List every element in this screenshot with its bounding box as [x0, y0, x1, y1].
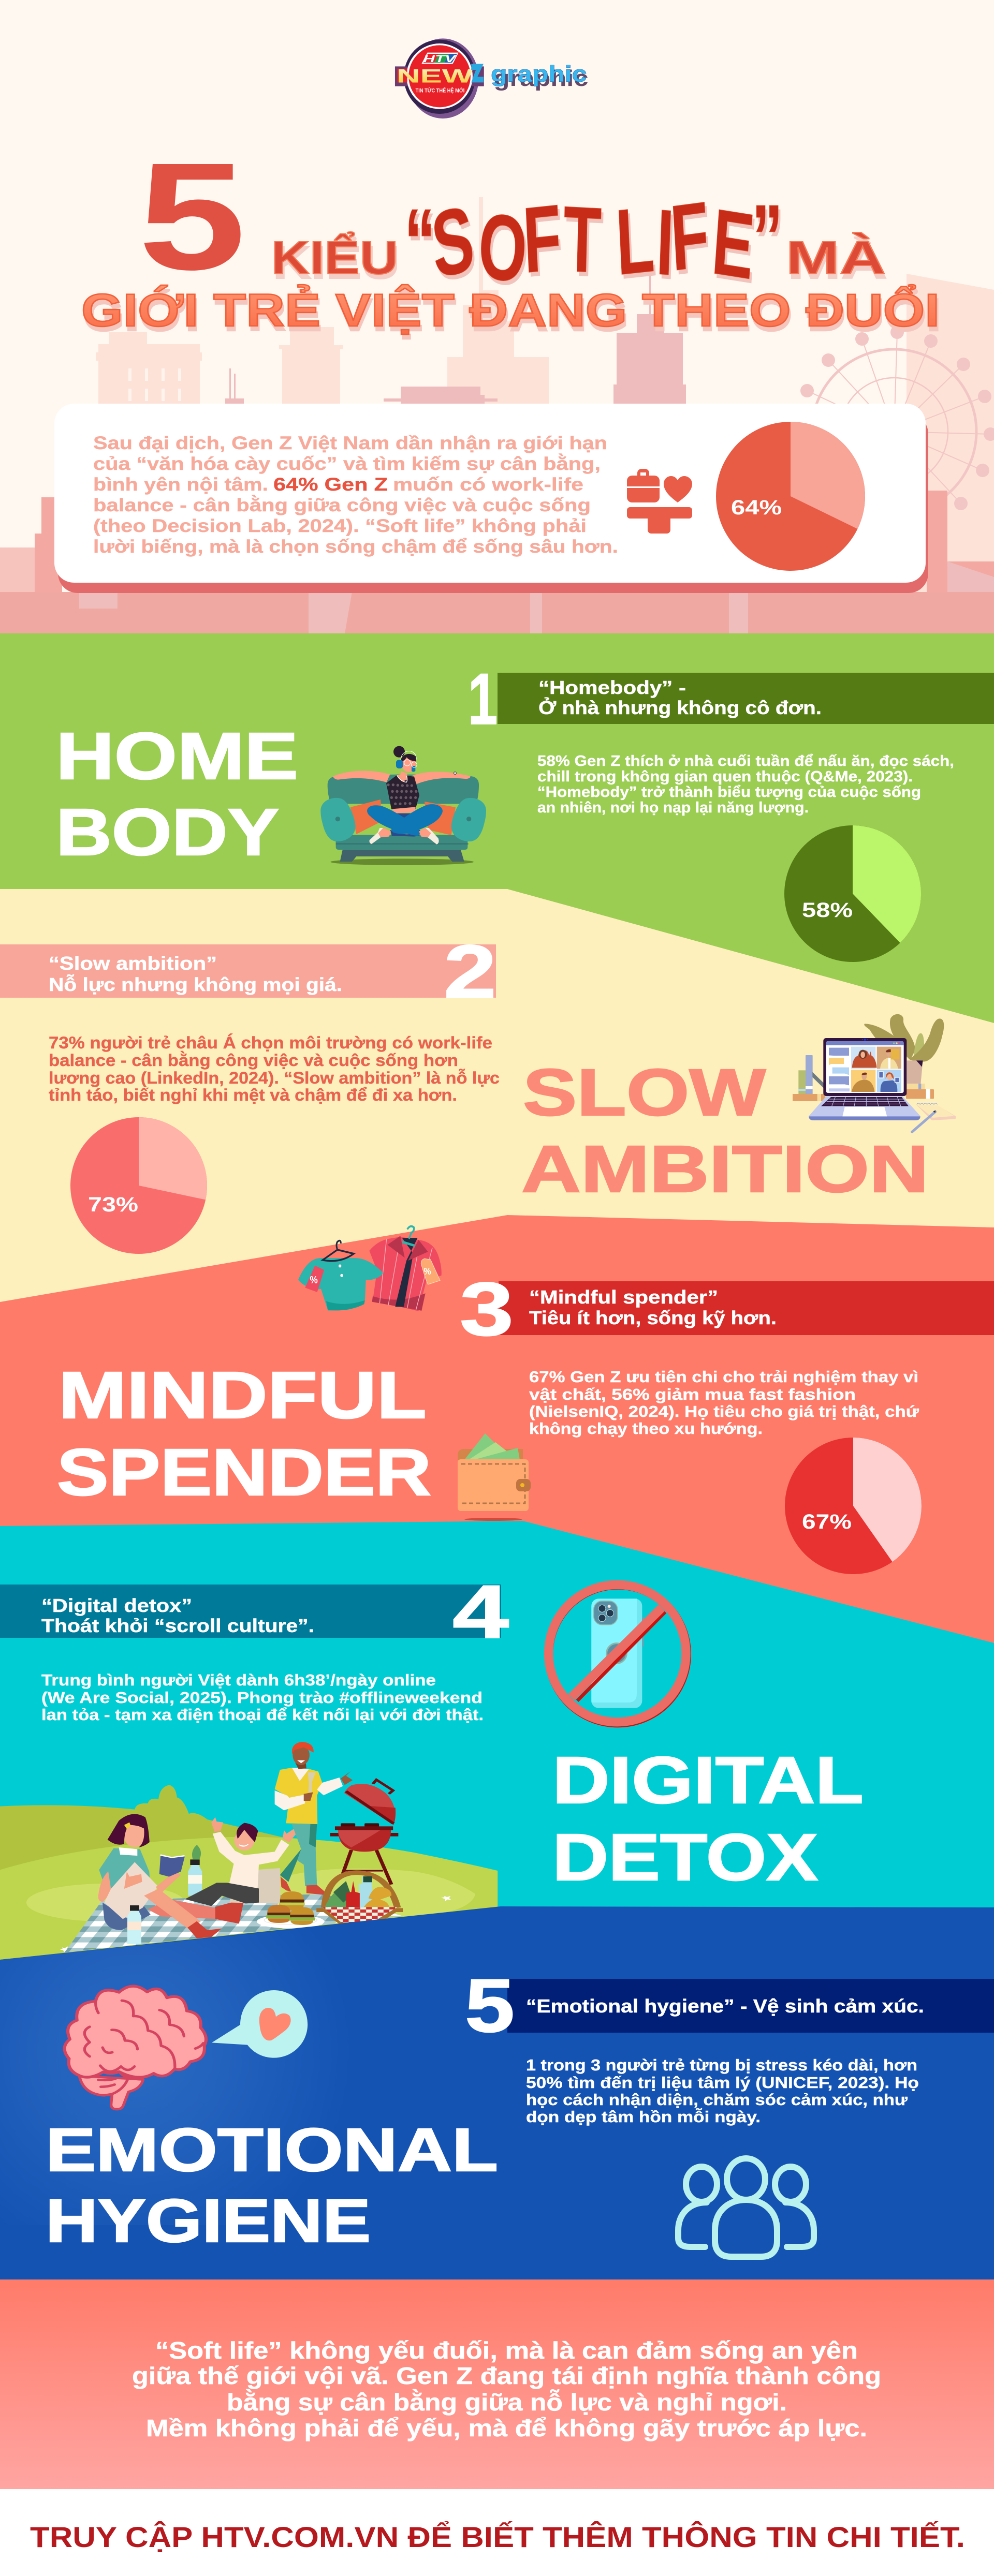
- title number 5: 5: [138, 131, 246, 302]
- number 5: 5: [465, 1963, 515, 2048]
- heading EMOTIONAL HYGIENE: HYGIENE: [46, 2187, 371, 2255]
- bar text 1: [538, 677, 822, 718]
- body text 5: 1 trong 3 người trẻ từng bị stress kéo dài, hơn: [526, 2056, 917, 2074]
- intro text: của “văn hóa cày cuốc” và tìm kiếm sự cân bằng,: [93, 453, 601, 474]
- body text 5: dọn dẹp tâm hồn mỗi ngày.: [526, 2108, 761, 2126]
- body text 4: Trung bình người Việt dành 6h38’/ngày online: [41, 1671, 436, 1689]
- section 5: emotional hygiene: [46, 1963, 994, 2257]
- pie chart: 73%: [70, 1117, 207, 1254]
- logo badge: TIN TỨC THẾ HỆ MỚI: [416, 87, 464, 94]
- intro text: Sau đại dịch, Gen Z Việt Nam dần nhận ra giới hạn: [93, 433, 607, 453]
- intro card: [54, 404, 928, 593]
- bar text 5: “Emotional hygiene” - Vệ sinh cảm xúc.: [526, 1995, 924, 2017]
- body text 4: lan tỏa - tạm xa điện thoại để kết nối lại với đời thật.: [41, 1706, 484, 1724]
- bar text 3: Tiêu ít hơn, sống kỹ hơn.: [529, 1307, 777, 1328]
- heading bar 2: [0, 944, 496, 998]
- body text 1: 58% Gen Z thích ở nhà cuối tuần để nấu ăn, đọc sách,: [537, 753, 954, 769]
- illustration: clothes with sale tags: %: [423, 1266, 431, 1277]
- basket: [316, 1873, 403, 1924]
- ferris wheel: [800, 325, 994, 514]
- header background: [0, 0, 994, 633]
- number 4: 4: [452, 1570, 509, 1654]
- pie chart: 67%: 67%: [802, 1511, 852, 1533]
- closing text: giữa thế giới vội vã. Gen Z đang tái định nghĩa thành công: [132, 2362, 881, 2389]
- intro text: muốn có work-life: [393, 475, 583, 495]
- heading SLOW AMBITION: [521, 1056, 929, 1206]
- heading DIGITAL DETOX: DETOX: [552, 1820, 818, 1894]
- body text 3: (NielsenIQ, 2024). Họ tiêu cho giá trị thật, chứ: [529, 1402, 919, 1420]
- grill: [330, 1780, 398, 1885]
- body text 2: lương cao (LinkedIn, 2024). “Slow ambition” là nỗ lực: [49, 1069, 500, 1087]
- icon: wallet with cash: [458, 1433, 531, 1521]
- bar text 3: “Mindful spender”: [529, 1286, 718, 1308]
- illustration: clothes with sale tags: %: [310, 1274, 318, 1285]
- body text 2: [49, 1033, 500, 1104]
- heading HOME BODY: HOME: [56, 719, 298, 793]
- section 2 background: [0, 880, 994, 1314]
- number 2: 2: [444, 929, 496, 1014]
- title: [81, 131, 940, 336]
- closing text: “Soft life” không yếu đuối, mà là can đảm sống an yên: [155, 2337, 858, 2364]
- illustration: picnic: [0, 1742, 498, 1960]
- heading SLOW AMBITION: AMBITION: [521, 1132, 929, 1206]
- title word: Soft Life: “SOFT LIFE”: [404, 184, 783, 301]
- soft glow behind brain: [0, 1922, 362, 2225]
- pie chart: 58%: 58%: [802, 899, 853, 922]
- closing text: Mềm không phải để yếu, mà để không gãy trước áp lực.: [146, 2415, 867, 2441]
- body text 3: 67% Gen Z ưu tiên chi cho trải nghiệm thay vì: [529, 1368, 918, 1386]
- closing text: [132, 2337, 881, 2441]
- logo word: graphic: graphic: [494, 66, 589, 91]
- body text 5: 50% tìm đến trị liệu tâm lý (UNICEF, 2023). Họ: [526, 2074, 919, 2092]
- section 3 background: [0, 1215, 994, 1643]
- bar text 4: “Digital detox”: [41, 1595, 192, 1616]
- heading MINDFUL SPENDER: SPENDER: [57, 1435, 431, 1509]
- pie chart: 73%: 73%: [88, 1193, 138, 1216]
- heading bar 3: [499, 1281, 994, 1335]
- icon: phone prohibited: [549, 1585, 687, 1723]
- speech bubble with heart: [212, 1990, 308, 2058]
- section 1: homebody: [56, 658, 994, 962]
- intro text: 64% Gen Z: [273, 475, 388, 495]
- pie chart: 64%: [716, 422, 865, 571]
- pie chart: 58%: [784, 825, 921, 962]
- section 1 background: [0, 633, 994, 1023]
- bar text 2: “Slow ambition”: [49, 953, 217, 974]
- city skyline backdrop: [0, 197, 994, 633]
- heading bar 1: [498, 673, 994, 724]
- icon: work-life balance: [627, 469, 692, 534]
- illustration: girl on sofa: [320, 746, 486, 865]
- intro text: lười biếng, mà là chọn sống chậm để sống sâu hơn.: [93, 537, 618, 557]
- body text 2: balance - cân bằng công việc và cuộc sống hơn: [49, 1051, 458, 1070]
- section 5 background: [0, 1906, 994, 2279]
- bar text 1: Ở nhà nhưng không cô đơn.: [538, 697, 822, 718]
- heading HOME BODY: [56, 719, 298, 869]
- heading HOME BODY: BODY: [56, 795, 279, 869]
- intro text: (theo Decision Lab, 2024). “Soft life” không phải: [93, 516, 587, 536]
- logo: HTV NewZ graphic: [395, 38, 589, 119]
- closing message panel: [0, 2279, 994, 2489]
- body text 2: 73% người trẻ châu Á chọn môi trường có work-life: [49, 1033, 492, 1052]
- heading bar 4: [0, 1585, 501, 1638]
- boy cheering: [185, 1817, 296, 1906]
- body text 1: an nhiên, nơi họ nạp lại năng lượng.: [537, 800, 809, 816]
- body text 3: vật chất, 56% giảm mua fast fashion: [529, 1385, 856, 1403]
- man at grill: [275, 1742, 353, 1895]
- heading EMOTIONAL HYGIENE: EMOTIONAL: [46, 2116, 498, 2184]
- icon: people: [678, 2158, 814, 2257]
- title line 2: GIỚI TRẺ VIỆT ĐANG THEO ĐUỔI: [81, 284, 940, 336]
- icon: brain: [65, 1986, 206, 2109]
- picnic blanket: [65, 1894, 403, 1952]
- section 3: mindful spender: [57, 1226, 994, 1574]
- bar text 3: [529, 1286, 777, 1328]
- bar text 4: Thoát khỏi “scroll culture”.: [41, 1615, 314, 1636]
- heading MINDFUL SPENDER: [57, 1358, 431, 1509]
- body text 2: tỉnh táo, biết nghỉ khi mệt và chậm để đi xa hơn.: [49, 1086, 457, 1104]
- footer call to action: TRUY CẬP HTV.COM.VN ĐỂ BIẾT THÊM THÔNG TIN CHI TIẾT.: [30, 2521, 965, 2553]
- section 4: digital detox: [0, 1570, 864, 1960]
- illustration: laptop video call: [793, 1014, 956, 1132]
- bar text 2: Nỗ lực nhưng không mọi giá.: [49, 974, 342, 995]
- heading DIGITAL DETOX: [552, 1743, 864, 1894]
- heading DIGITAL DETOX: DIGITAL: [552, 1743, 864, 1817]
- heading EMOTIONAL HYGIENE: [46, 2116, 498, 2255]
- illustration: clothes with sale tags: [298, 1226, 442, 1311]
- body text 1: “Homebody” trở thành biểu tượng của cuộc sống: [537, 784, 921, 801]
- intro text: bình yên nội tâm.: [93, 475, 268, 495]
- body text 5: học cách nhận diện, chăm sóc cảm xúc, như: [526, 2091, 908, 2109]
- intro text: balance - cân bằng giữa công việc và cuộc sống: [93, 495, 591, 515]
- girl reading: [98, 1814, 244, 1944]
- body text 4: [41, 1671, 484, 1724]
- heading SLOW AMBITION: SLOW: [523, 1056, 766, 1130]
- heading MINDFUL SPENDER: MINDFUL: [59, 1358, 427, 1432]
- footer strip: [0, 2489, 994, 2576]
- section 4 background: [0, 1501, 994, 1966]
- burgers: [257, 1891, 325, 1929]
- body text 4: (We Are Social, 2025). Phong trào #offlineweekend: [41, 1689, 483, 1707]
- body text 3: không chạy theo xu hướng.: [529, 1419, 763, 1438]
- intro text: [93, 433, 618, 557]
- logo word: graphic: graphic: [491, 61, 587, 86]
- bar text 4: [41, 1595, 314, 1636]
- number 1: 1: [468, 658, 498, 739]
- pie chart: 64%: 64%: [731, 496, 782, 519]
- logo badge: [395, 38, 484, 119]
- heading bar 5: [507, 1979, 994, 2033]
- body text 3: [529, 1368, 919, 1438]
- logo badge: HTV: [423, 53, 457, 64]
- bar text 2: [49, 953, 342, 995]
- bar text 1: “Homebody” -: [538, 677, 686, 698]
- section 2: slow ambition: [0, 929, 956, 1254]
- title word: KIỂU: KIỂU: [271, 231, 398, 284]
- hills: [0, 1785, 498, 1960]
- closing text: bằng sự cân bằng giữa nỗ lực và nghỉ ngơi.: [227, 2389, 787, 2416]
- title word: MÀ: MÀ: [786, 232, 886, 284]
- body text 1: [537, 753, 954, 816]
- logo badge: NEW: [397, 65, 473, 87]
- number 3: 3: [460, 1267, 514, 1351]
- pie chart: 67%: [785, 1438, 922, 1574]
- body text 5: [526, 2056, 919, 2126]
- body text 1: chill trong không gian quen thuộc (Q&Me, 2023).: [537, 768, 913, 785]
